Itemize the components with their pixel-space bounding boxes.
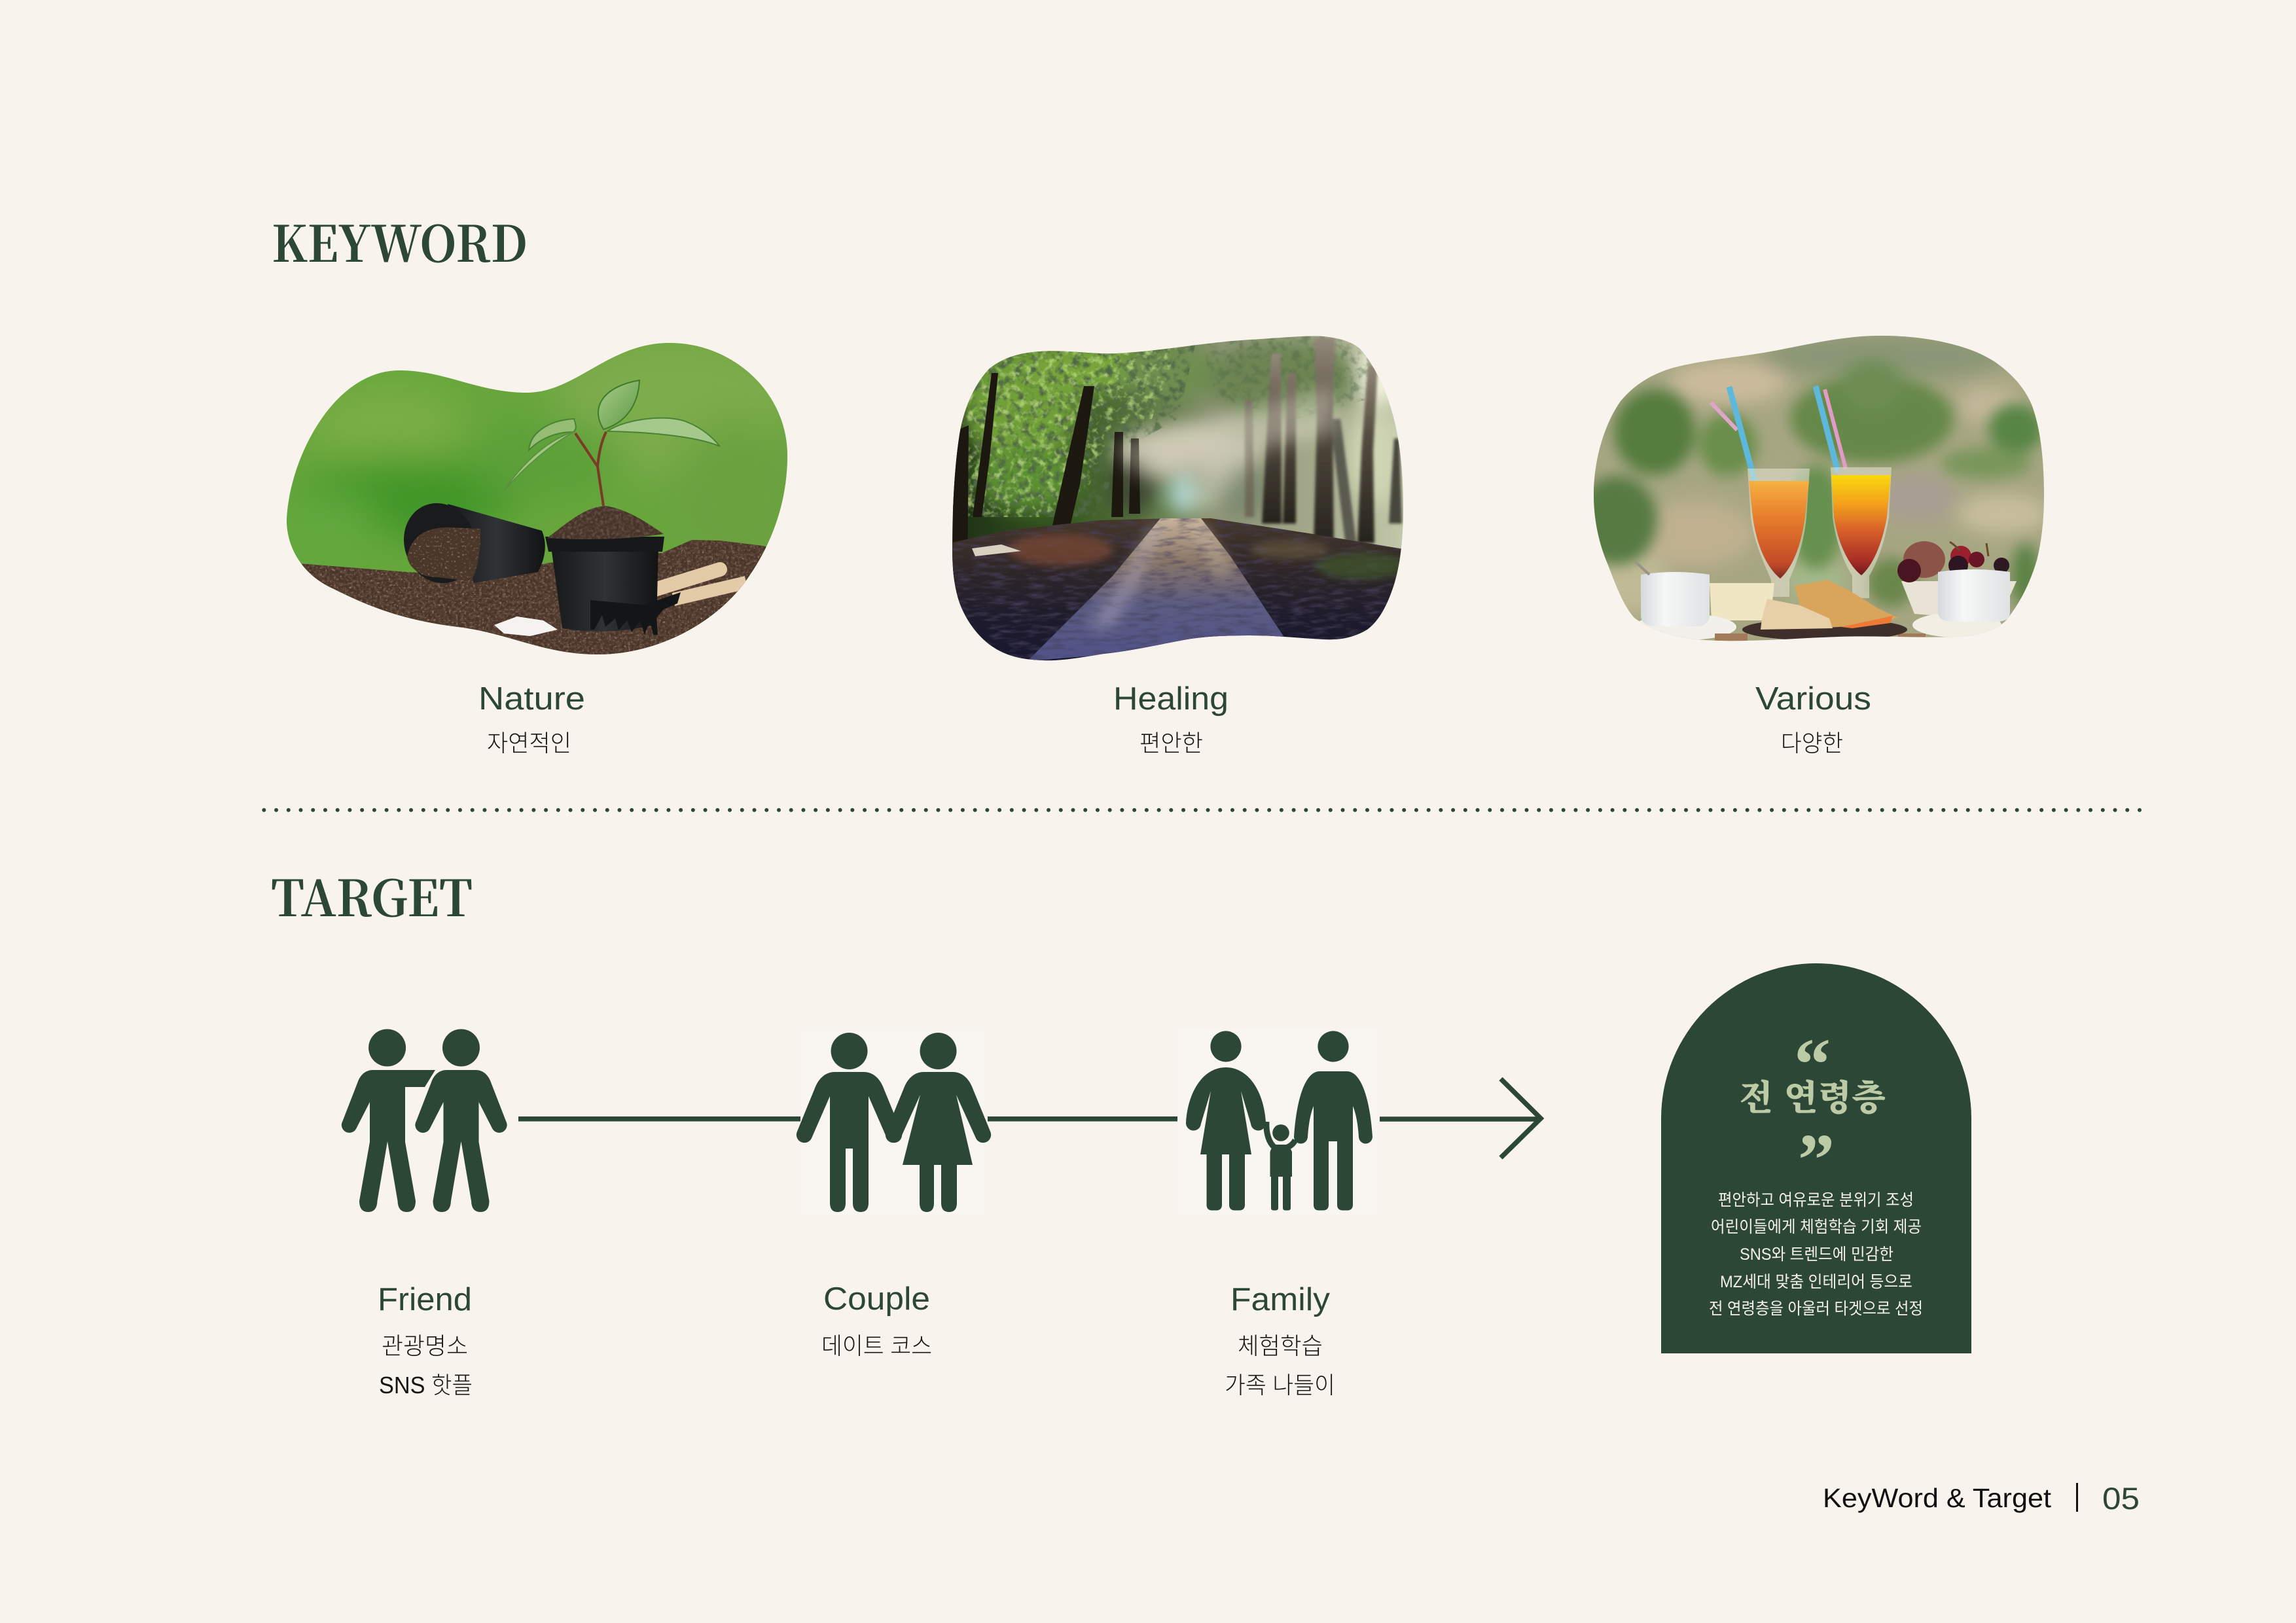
- standing pot: [551, 546, 658, 632]
- rake: [590, 600, 664, 635]
- label: Friend: Friend: [378, 1282, 472, 1317]
- leaf litter: [1008, 534, 1407, 579]
- table: [1715, 633, 1748, 643]
- arrow: family to all ages: [1380, 1079, 1541, 1158]
- description text: [1709, 1191, 1923, 1318]
- stems: [575, 432, 606, 506]
- lying pot: [448, 504, 545, 583]
- description text: SNS와 트렌드에 민감한: [1740, 1245, 1893, 1264]
- label: Couple: 데이트 코스: [821, 1332, 932, 1359]
- right glass: [1831, 467, 1892, 598]
- arch background: [1661, 963, 1971, 1353]
- label: Couple: [821, 1281, 932, 1359]
- footer divider: [2076, 1483, 2078, 1512]
- heading: TARGET: TARGET: [271, 859, 473, 931]
- label: Family: 가족 나들이: [1225, 1372, 1335, 1399]
- label: Various: Various: [1755, 681, 1871, 717]
- tree trunks: right: [1245, 338, 1402, 556]
- label: Couple: Couple: [823, 1281, 930, 1317]
- label: Nature: Nature: [478, 681, 585, 717]
- pastry: [1795, 580, 1898, 628]
- label: Family: 체험학습: [1238, 1332, 1323, 1359]
- canopy on the right: [1198, 334, 1374, 419]
- photo: juice and dessert table: [1576, 333, 2049, 648]
- ground: [949, 518, 1407, 668]
- description text: 편안하고 여유로운 분위기 조성: [1718, 1191, 1914, 1209]
- photo: forest road: [949, 334, 1407, 668]
- tree trunks: left: [953, 373, 1140, 576]
- heading: KEYWORD: KEYWORD: [272, 205, 528, 276]
- right cup and saucer: [1912, 613, 2001, 637]
- description text: MZ세대 맞춤 인테리어 등으로: [1720, 1273, 1912, 1291]
- label: 편안한: 편안한: [1139, 730, 1203, 757]
- panel: Healing keyword: [949, 334, 1407, 757]
- powder: [494, 616, 558, 636]
- quote mark: open: “: [1794, 1024, 1831, 1105]
- footer: [1823, 1481, 2140, 1516]
- label: Family: [1225, 1282, 1335, 1399]
- left cup and saucer: [1634, 614, 1736, 640]
- label: 자연적인: 자연적인: [487, 730, 571, 757]
- soil: [301, 540, 766, 654]
- page number: 05: [2102, 1481, 2140, 1516]
- label: 다양한: 다양한: [1781, 730, 1843, 757]
- panel: Various keyword: [1576, 333, 2049, 757]
- label: Friend: [378, 1282, 473, 1399]
- description text: 전 연령층을 아울러 타겟으로 선정: [1709, 1300, 1923, 1318]
- left glass: [1748, 469, 1810, 597]
- quote mark: close: ”: [1798, 1120, 1835, 1201]
- glass dessert bowl: [1710, 583, 1774, 620]
- label: Healing: Healing: [1113, 681, 1229, 717]
- panel: target flow: [342, 1029, 1541, 1399]
- icon: friends: [342, 1029, 507, 1212]
- label: Friend: 관광명소: [382, 1332, 468, 1359]
- footer title: KeyWord & Target: [1823, 1483, 2052, 1513]
- road highlights: [1086, 524, 1230, 628]
- fruit: [1903, 541, 1945, 578]
- straws: [1711, 402, 1737, 430]
- leaves: [598, 380, 639, 429]
- connector line: couple to family: [988, 1116, 1177, 1122]
- icon: family: [1177, 1030, 1378, 1215]
- connector line: friend to couple: [518, 1116, 800, 1122]
- label: Friend: SNS 핫플: [379, 1372, 473, 1399]
- icon: couple: [797, 1031, 991, 1215]
- photo: seedling in a pot: [287, 343, 787, 654]
- panel: all ages arch card: [1661, 963, 1971, 1353]
- foliage texture: [949, 334, 1198, 517]
- road: [1028, 518, 1286, 661]
- description text: 어린이들에게 체험학습 기회 제공: [1711, 1218, 1922, 1236]
- fruit bowl: [1901, 581, 2017, 616]
- title: 전 연령층: 전 연령층: [1739, 1070, 1886, 1120]
- plate: [1742, 618, 1907, 641]
- panel: Nature keyword: [275, 334, 812, 757]
- label: Family: Family: [1230, 1282, 1331, 1317]
- wooden handles: [655, 569, 720, 590]
- light rays: [1113, 386, 1335, 510]
